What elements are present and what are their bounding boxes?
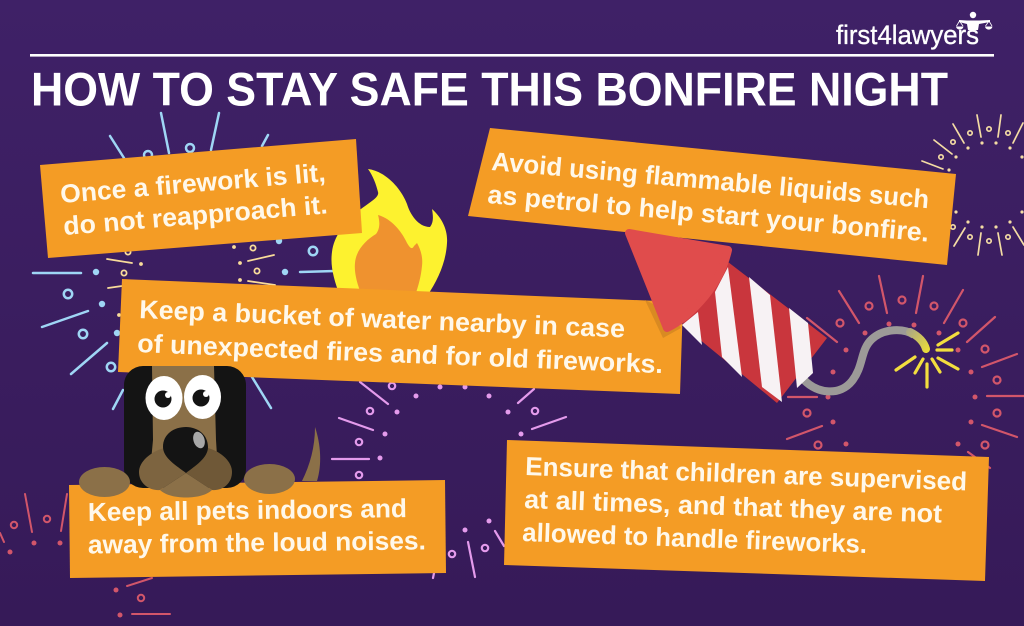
- panel text: pets: Keep all pets indoors and: [88, 493, 407, 527]
- panel text: bucket: of unexpected fires and for old fireworks.: [137, 328, 664, 379]
- panel: flammable liquids tip: [468, 128, 956, 265]
- firework: blue burst: [33, 113, 335, 409]
- logo: first4lawyers: first4lawyers: [836, 20, 979, 50]
- panel text: pets: [88, 493, 426, 559]
- dog tail: [302, 427, 320, 481]
- panel: children tip: [504, 440, 989, 581]
- firework: red burst bottom left: [0, 494, 170, 618]
- dog head: [124, 366, 246, 488]
- panel: pets: [69, 480, 446, 578]
- rocket cone shadow: [645, 300, 681, 338]
- panel text: bucket: [137, 294, 664, 379]
- panel: bucket of water tip: [118, 279, 683, 394]
- icon: flame: [331, 169, 447, 296]
- panel text: children: allowed to handle fireworks.: [522, 517, 868, 559]
- panel text: children: [522, 451, 968, 559]
- icon: dog peeking over panel: [79, 366, 320, 498]
- panel text: firework: do not reapproach it.: [62, 189, 329, 241]
- panel text: pets: away from the loud noises.: [88, 525, 426, 559]
- panel text: children: Ensure that children are supervised: [525, 451, 968, 496]
- dog eyes: [146, 375, 221, 420]
- firework: cream burst top right: [922, 115, 1024, 255]
- panel text: liquids: as petrol to help start your bonfire.: [486, 179, 930, 248]
- panel: first firework tip: [40, 139, 362, 258]
- rocket sparks: [896, 333, 958, 387]
- rocket fuse: [804, 330, 914, 391]
- rocket nose cone: [629, 233, 728, 328]
- title: HOW TO STAY SAFE THIS BONFIRE NIGHT: [31, 62, 948, 116]
- dog nose: [163, 427, 208, 473]
- icon: figure holding scales: [956, 12, 992, 30]
- firework: red burst by the fuse: [787, 276, 1024, 468]
- rocket body: [682, 262, 827, 403]
- dog paws: [79, 464, 295, 497]
- title rule: [30, 54, 994, 57]
- panel text: liquids: [486, 146, 930, 248]
- rocket stripes: [682, 267, 813, 402]
- panel text: liquids: Avoid using flammable liquids such: [490, 146, 930, 214]
- dog muzzle: [139, 448, 232, 498]
- panel text: firework: [59, 157, 329, 241]
- panel text: children: at all times, and that they are not: [524, 484, 943, 529]
- firework: cream inner burst: [107, 245, 275, 317]
- panel text: bucket: Keep a bucket of water nearby in case: [139, 294, 626, 343]
- panel text: firework: Once a firework is lit,: [59, 157, 327, 209]
- icon: rocket with lit fuse: [629, 233, 958, 403]
- firework: pink burst: [332, 382, 566, 578]
